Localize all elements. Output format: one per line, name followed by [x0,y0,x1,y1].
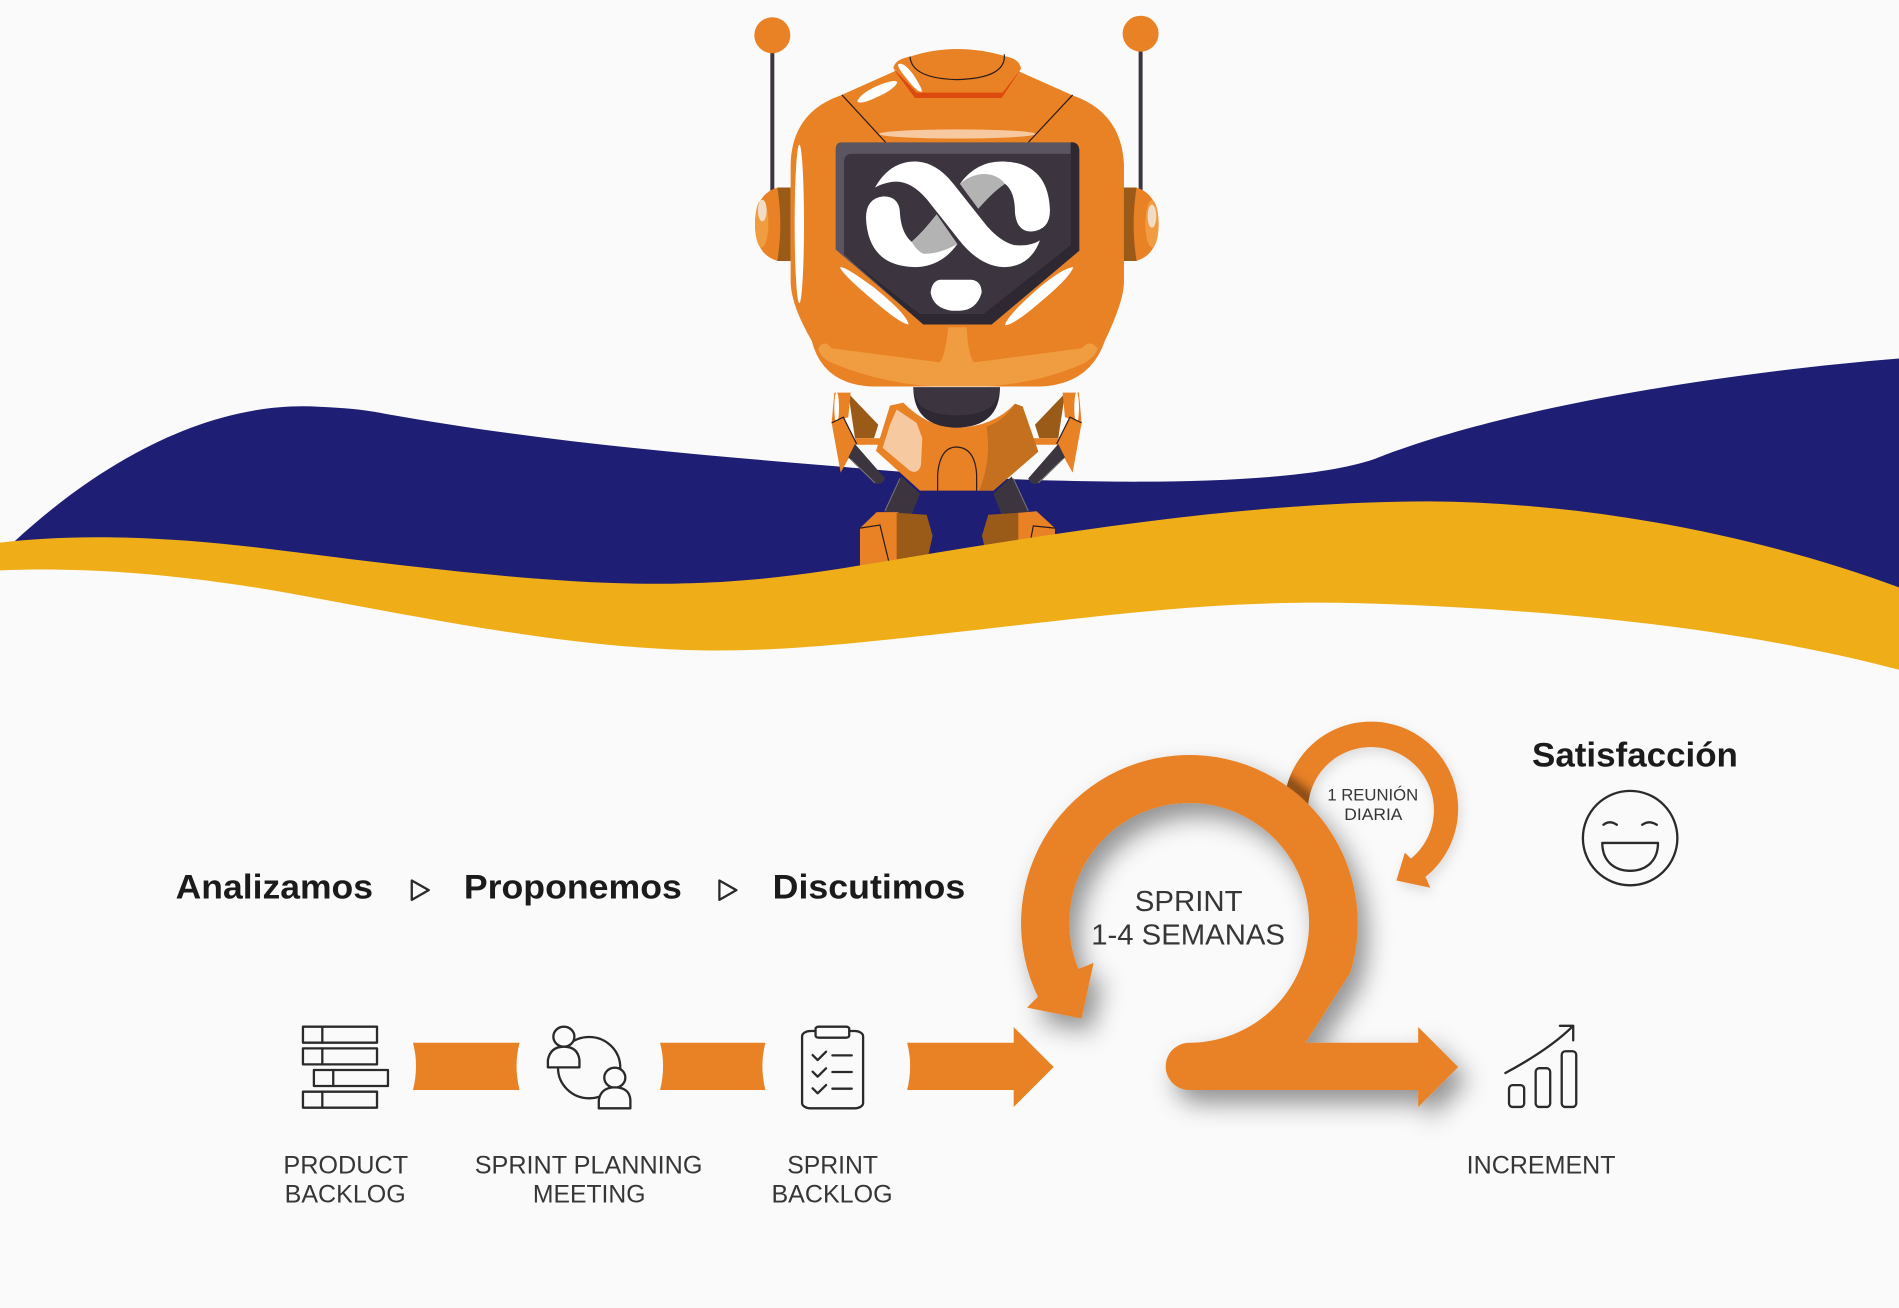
icon: smiley face [1583,791,1677,885]
daily loop arrow [1286,722,1464,894]
robot [754,16,1159,570]
sprint label: SPRINT [1135,886,1243,918]
chin highlight [818,327,1098,387]
icon: product backlog [303,1027,388,1108]
process arrow segment 1 [413,1043,520,1090]
daily meeting label: DIARIA [1344,805,1403,824]
navy wave [15,358,1899,593]
arrow marker 2 [719,880,736,900]
icon: sprint planning meeting [548,1027,630,1108]
ears [755,188,1159,261]
sprint loop arrow [1021,755,1458,1107]
yellow wave [0,501,1899,670]
antennas [754,16,1159,193]
label: increment: INCREMENT [1467,1152,1616,1180]
daily meeting label: 1 REUNIÓN [1327,786,1418,805]
label: product backlog [283,1152,408,1209]
label: product backlog: BACKLOG [285,1181,406,1209]
infinity logo [866,161,1050,267]
sprint label [1091,886,1285,952]
icon: increment chart [1505,1026,1576,1107]
label: product backlog: PRODUCT [283,1152,408,1180]
head highlights [795,64,1073,325]
heading: Satisfacción: Satisfacción [1532,737,1738,775]
torso [876,403,1038,491]
label: sprint planning meeting [475,1152,702,1209]
mouth [931,280,982,311]
arms [832,392,885,484]
head cap [893,69,1021,98]
neck [913,387,1000,428]
head [791,49,1124,387]
process arrow into sprint [907,1027,1054,1107]
heading: Discutimos: Discutimos [773,869,965,907]
sprint label: 1-4 SEMANAS [1091,920,1285,952]
label: sprint backlog: SPRINT [787,1152,878,1180]
step headings [176,869,965,907]
label: sprint backlog [771,1152,893,1209]
legs and feet [860,476,1055,570]
heading: Analizamos: Analizamos [176,869,373,907]
heading: Proponemos: Proponemos [464,869,682,907]
visor [836,142,1079,325]
label: sprint planning meeting: MEETING [533,1181,646,1209]
icon: sprint backlog clipboard [802,1027,863,1108]
label: sprint backlog: BACKLOG [771,1181,893,1209]
arrow marker 1 [412,880,429,900]
process arrow segment 2 [660,1043,765,1090]
right arm [1028,392,1082,484]
label: sprint planning meeting: SPRINT PLANNING [475,1152,702,1180]
daily meeting label [1327,786,1418,824]
